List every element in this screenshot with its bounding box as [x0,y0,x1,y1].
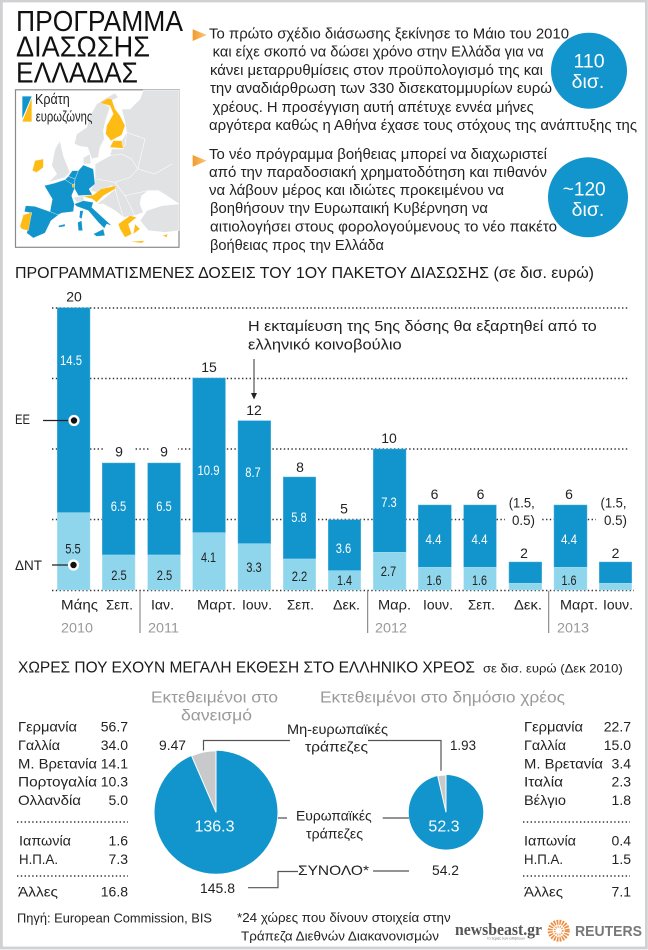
text block: first bailout: Το πρώτο σχέδιο διάσωσης ξεκίνησε το Μάιο του 2010 [209,26,569,42]
table: lending by country: Γερμανία [18,719,77,735]
bar: Μαρ. 2012: 7.3 [381,494,397,510]
x axis labels: months: Σεπ. [106,596,133,612]
bar: Μαρτ. 2011 [193,359,225,590]
bar: Ιουν. 2011 [238,402,271,590]
title: ΠΡΟΓΡΑΜΜΑ [16,6,184,38]
text block: new programme: αιτιολογήσει στους φορολογούμενους το νέο πακέτο [210,220,557,236]
logo: newsbeast.gr: το τέρας των ειδήσεων [487,936,525,940]
text block: first bailout: και είχε σκοπό να δώσει χρόνο στην Ελλάδα για να [213,44,544,60]
annotation: fifth tranche: ελληνικό κοινοβούλιο [248,337,402,353]
label: total [200,862,459,896]
legend: IMF marker [15,557,78,573]
table: public debt by country: Βέλγιο [524,792,566,808]
text block: first bailout: χρέους. Η προσέγγιση αυτή απέτυχε εννέα μήνες [213,100,534,116]
label: non-European banks: Μη-ευρωπαϊκές [287,721,388,737]
bar: Σεπ. 2012: 1.6 [472,572,487,588]
label: non-European banks: τράπεζες [305,739,368,755]
label: total: ΣΥΝΟΛΟ* [298,862,370,878]
x axis labels: months: Ιαν. [151,596,174,612]
label: non-European banks: 9.47 [159,737,186,753]
arrow: annotation to June bar [251,359,257,400]
table: lending by country: Πορτογαλία [18,774,97,790]
bar chart: planned tranches [52,289,634,636]
x axis labels: months: Σεπ. [287,596,314,612]
legend: EU marker: ΕΕ [15,411,30,427]
table: lending by country: 5.0 [109,792,128,808]
bar: Ιουν. 2012: 4.4 [426,531,442,547]
bar: Σεπ. 2010: 2.5 [111,567,127,583]
x axis labels: years: 2013 [557,620,589,636]
bar: Δεκ. 2011: 3.6 [336,540,351,556]
bar: Μάης 2010 [57,289,90,590]
bar: Δεκ. 2012: 0.5) [512,512,535,528]
text block: first bailout: κάνει μεταρρυθμίσεις στον προϋπολογισμό της και [210,63,543,79]
x axis labels: years: 2012 [375,620,407,636]
footnote: Τράπεζα Διεθνών Διακανονισμών [241,929,439,944]
label: non-European banks [159,721,476,771]
label: European banks: τράπεζες [306,826,363,842]
text block: first bailout [209,26,637,134]
title: ΔΙΑΣΩΣΗΣ [16,32,150,64]
text block: new programme: βοηθήσουν την Ευρωπαική Κυβέρνηση να [210,201,488,217]
bar: Ιουν. 2011: 3.3 [246,559,262,575]
bar: Σεπ. 2010: 9 [115,444,123,460]
table: lending by country: Μ. Βρετανία [18,755,97,771]
table: public debt by country: 3.4 [612,755,631,771]
bar: Ιουν. 2013: 2 [612,545,620,561]
table: public debt by country: Ιταλία [524,774,563,790]
callout: 110 bn [551,33,627,109]
x axis labels: months [61,596,633,612]
bar: Σεπ. 2011: 5.8 [291,509,307,525]
table: public debt by country: Γαλλία [524,737,566,753]
table: public debt by country [523,719,631,900]
bar: Δεκ. 2012: (1.5, [509,494,535,510]
table: lending by country: 7.3 [109,851,128,867]
bar: Σεπ. 2010 [102,444,135,590]
x axis labels: months: Δεκ. [514,596,542,612]
heading: exposure: ΧΩΡΕΣ ΠΟΥ ΕΧΟΥΝ ΜΕΓΑΛΗ ΕΚΘΕΣΗ ΣΤΟ ΕΛΛΗΝΙΚΟ ΧΡΕΟΣ [18,660,475,677]
bar: Σεπ. 2012 [464,486,496,590]
table: public debt by country: 1.8 [612,792,631,808]
subheading: exposed to lending: Εκτεθειμένοι στο [151,690,278,707]
heading: exposure: σε δισ. ευρώ (Δεκ 2010) [483,662,623,676]
bar: Ιουν. 2012: 1.6 [426,572,442,588]
footnote [237,910,451,944]
bar: Μαρ. 2012: 10 [381,430,397,446]
table: public debt by country: Γερμανία [524,719,583,735]
map: eurozone states: ευρωζώνης [36,110,92,126]
table: lending by country: 1.6 [109,833,128,849]
table: public debt by country: 15.0 [604,737,631,753]
text block: new programme: να λάβουν μέρος και ιδιώτες προκειμένου να [209,183,504,199]
x axis labels: months: Μαρτ. [197,596,236,612]
table: public debt by country: Μ. Βρετανία [524,755,603,771]
pie chart: lending [154,751,278,874]
logo: Reuters sun [550,922,567,939]
bar: Ιαν. 2011: 9 [160,444,168,460]
table: public debt by country: Ιαπωνία [524,833,576,849]
text block: new programme: βοήθειας προς την Ελλάδα [210,238,384,254]
footnote: *24 χώρες που δίνουν στοιχεία στην [237,910,451,925]
table: lending by country: 34.0 [101,737,128,753]
callout: ~120 bn: δισ. [572,199,604,221]
x axis labels: years [61,591,589,636]
bar: Μάης 2010: 5.5 [65,540,81,556]
x axis labels: years: 2010 [61,620,93,636]
table: lending by country: Γαλλία [18,737,60,753]
bar: Ιουν. 2012: 6 [431,486,439,502]
table: public debt by country: Άλλες [524,884,563,900]
title [16,6,184,90]
bar: Ιουν. 2011: 8.7 [245,464,261,480]
table: public debt by country: 1.5 [612,851,631,867]
bar: Μαρ. 2012 [373,430,406,590]
logo: Reuters wordmark: REUTERS [575,923,642,940]
bar: Μαρτ. 2013 [554,486,587,590]
bar: Μαρτ. 2013: 6 [565,486,573,502]
bar: Μαρτ. 2011: 10.9 [198,462,220,478]
x axis labels: months: Μαρ. [378,596,411,612]
table: lending by country: 14.1 [101,755,128,771]
x axis labels: months: Μαρτ. [560,596,598,612]
icon: orange arrow 2 [193,155,207,167]
x axis labels: months: Ιουν. [603,596,633,612]
table: public debt by country: 22.7 [604,719,631,735]
table: lending by country: Άλλες [18,884,58,900]
orange states [20,98,168,243]
bar: Μαρτ. 2011: 4.1 [201,549,216,565]
pie chart: public debt: 52.3 [428,819,460,836]
annotation: fifth tranche [248,319,597,353]
x axis labels: months: Ιουν. [423,596,453,612]
table: public debt by country: 2.3 [612,774,631,790]
bar: Δεκ. 2011: 5 [340,500,348,516]
text block: first bailout: την αναδιάρθρωση των 330 δισεκατομμυρίων ευρώ [210,81,552,97]
bar: Σεπ. 2012: 6 [477,486,485,502]
source: Πηγή: European Commission, BIS [17,911,212,926]
subheading: exposed to lending [151,690,278,725]
subheading: exposed to public debt: Εκτεθειμένοι στο δημόσιο χρέος [320,690,565,707]
table: public debt by country: 7.1 [612,884,631,900]
bar: Ιαν. 2011: 2.5 [157,567,172,583]
table: lending by country: 16.8 [101,884,128,900]
table: public debt by country: 0.4 [612,833,631,849]
bar: Μαρ. 2012: 2.7 [381,563,396,579]
bar: Ιουν. 2011: 12 [246,402,262,418]
x axis labels: months: Ιουν. [242,596,272,612]
bar: Ιουν. 2013 [599,494,632,590]
bar: Ιουν. 2013: 0.5) [604,512,627,528]
bar: Σεπ. 2010: 6.5 [111,498,126,514]
x axis labels: years: 2011 [148,620,179,636]
text block: first bailout: αργότερα καθώς η Αθήνα έχασε τους στόχους της ανάπτυξης της [209,118,637,134]
bar: Ιουν. 2012 [418,486,451,590]
text block: new programme: από την παραδοσιακή χρηματοδότηση και πιθανόν [209,165,547,181]
bar: Ιαν. 2011 [148,444,180,590]
title: ΕΛΛΑΔΑΣ [16,58,138,90]
bar: Δεκ. 2012 [509,494,542,590]
bar: Μαρτ. 2013: 4.4 [561,531,577,547]
bar: Ιαν. 2011: 6.5 [156,498,172,514]
bar: Δεκ. 2012: 2 [520,545,528,561]
legend: IMF marker: ΔΝΤ [15,557,42,573]
bar: Ιουν. 2013: (1.5, [600,494,626,510]
bar: Μαρτ. 2013: 1.6 [562,572,577,588]
table: public debt by country: Η.Π.Α. [524,851,563,867]
text block: new programme: Το νέο πρόγραμμα βοήθειας μπορεί να διαχωριστεί [209,147,548,163]
bar: Δεκ. 2011 [328,500,361,590]
bar: Δεκ. 2011: 1.4 [337,572,352,588]
text block: new programme [209,147,557,254]
bar: Μαρτ. 2011: 15 [201,359,217,375]
x axis labels: months: Μάης [61,596,98,612]
table: lending by country: Η.Π.Α. [19,851,58,867]
table: lending by country [17,719,128,900]
icon: orange arrow 1 [193,29,207,41]
map: eurozone states: Κράτη [35,92,70,108]
bar: Σεπ. 2011: 2.2 [292,568,307,584]
blue states [24,165,112,238]
bar: Σεπ. 2012: 4.4 [472,531,488,547]
callout: 110 bn: δισ. [572,71,604,93]
x axis labels: months: Δεκ. [333,596,360,612]
legend: EU marker [15,411,78,427]
x axis labels: months: Σεπ. [468,596,495,612]
label: European banks: Ευρωπαϊκές [296,808,372,824]
bar: Μάης 2010: 14.5 [60,352,82,368]
label: European banks [278,808,409,842]
label: total: 145.8 [200,880,235,896]
pie chart: lending: 136.3 [194,819,235,836]
bar: Σεπ. 2011: 8 [296,459,304,475]
subheading: exposed to lending: δανεισμό [181,708,252,725]
map: eurozone states [16,90,179,247]
callout: ~120 bn [548,157,628,237]
callout: 110 bn: 110 [573,51,605,73]
annotation: fifth tranche: Η εκταμίευση της 5ης δόσης θα εξαρτηθεί από το [248,319,597,335]
table: lending by country: Ολλανδία [18,792,81,808]
table: lending by country: 56.7 [101,719,128,735]
heading: tranches: ΠΡΟΓΡΑΜΜΑΤΙΣΜΕΝΕΣ ΔΟΣΕΙΣ ΤΟΥ 1ΟΥ ΠΑΚΕΤΟΥ ΔΙΑΣΩΣΗΣ (σε δισ. ευρώ) [15,265,594,282]
table: lending by country: Ιαπωνία [19,833,71,849]
pie chart: public debt [409,775,483,850]
icon: legend swatch [22,96,32,122]
logo: newsbeast.gr: newsbeast.gr [455,920,542,939]
bar: Σεπ. 2011 [283,459,316,590]
label: total: 54.2 [432,862,459,878]
label: non-European banks: 1.93 [450,737,476,753]
bar: Μάης 2010: 20 [66,289,82,305]
callout: ~120 bn: ~120 [563,179,606,201]
table: lending by country: 10.3 [101,774,128,790]
